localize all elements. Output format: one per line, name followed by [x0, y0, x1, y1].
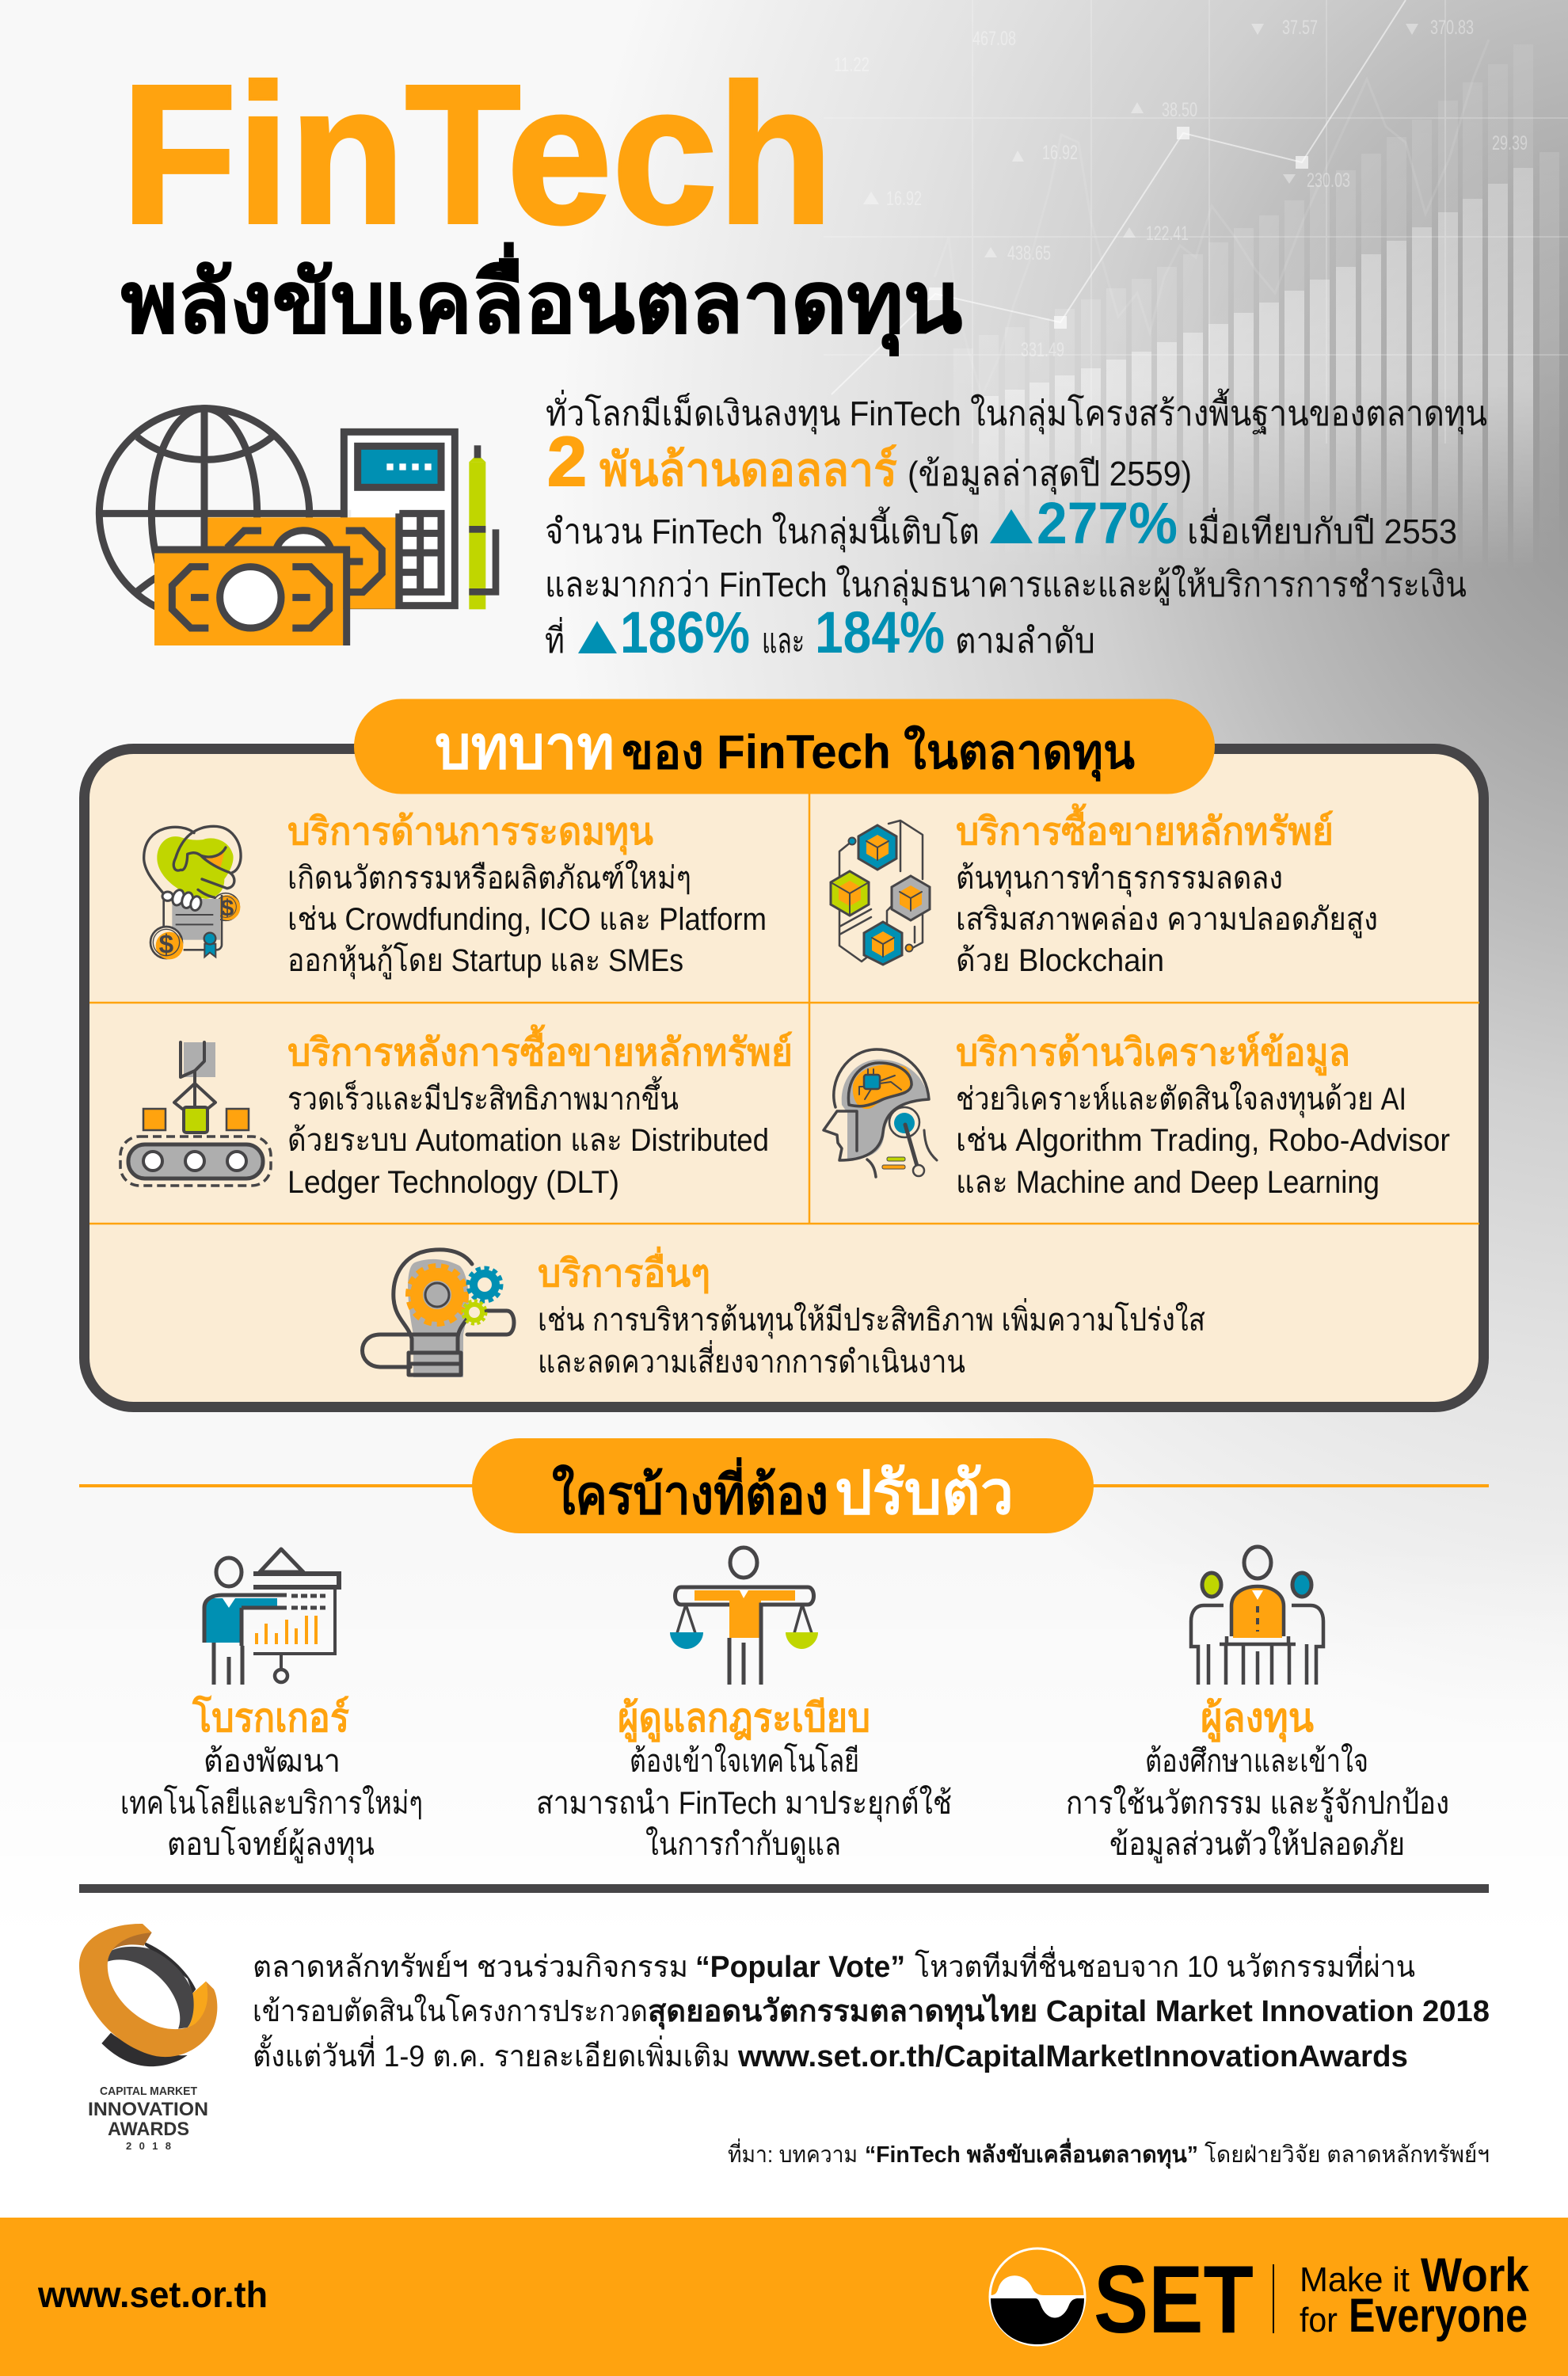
column: investors: ต้องศึกษาและเข้าใจ	[1145, 1742, 1368, 1779]
card: securities trading: บริการซื้อขายหลักทรัพย์	[956, 803, 1334, 853]
card: fundraising: เกิดนวัตกรรมหรือผลิตภัณฑ์ใหม่ๆ	[287, 859, 691, 896]
card: other services: เช่น การบริหารต้นทุนให้มีประสิทธิภาพ เพิ่มความโปร่งใส	[538, 1298, 1205, 1339]
panel heading pill: บทบาท	[435, 714, 615, 782]
card: fundraising: ออกหุ้นกู้โดย Startup และ SMEs	[287, 942, 683, 980]
source note: “FinTech พลังขับเคลื่อนตลาดทุน”	[865, 2138, 1198, 2168]
card: securities trading: ด้วย Blockchain	[956, 943, 1164, 978]
intro text line 4: และมากกว่า FinTech ในกลุ่มธนาคารและและผู้ให้บริการการชำระเงิน	[545, 565, 1467, 606]
logo: Capital Market Innovation Awards 2018	[79, 1924, 217, 2152]
logo: Capital Market Innovation Awards 2018: INNOVATION	[88, 2099, 208, 2120]
column: investors: ข้อมูลส่วนตัวให้ปลอดภัย	[1109, 1826, 1405, 1863]
intro stat: 2 thousand million dollars	[547, 422, 1192, 501]
footer website: www.set.or.th	[37, 2274, 268, 2315]
column: brokers: เทคโนโลยีและบริการใหม่ๆ	[120, 1784, 423, 1821]
card: securities trading	[831, 803, 1378, 978]
icon: robot arm and conveyor	[120, 1042, 271, 1186]
footer band	[0, 2218, 1568, 2376]
title: FinTech: FinTech	[121, 44, 833, 265]
panel heading pill	[354, 699, 1215, 794]
text: 29.39	[1492, 132, 1528, 154]
column: brokers: โบรกเกอร์	[192, 1694, 349, 1740]
logo: SET: for	[1300, 2301, 1338, 2340]
card: fundraising: บริการด้านการระดมทุน	[287, 811, 653, 855]
intro stat: 2 thousand million dollars: พันล้านดอลลาร์	[599, 444, 897, 496]
source note	[728, 2138, 1490, 2168]
logo: Capital Market Innovation Awards 2018: CAPITAL MARKET	[100, 2085, 197, 2098]
section heading pill: who must adapt: ปรับตัว	[835, 1460, 1014, 1527]
intro stat: 186% and 184%	[545, 600, 1095, 665]
column: regulators: ผู้ดูแลกฎระเบียบ	[618, 1696, 870, 1742]
campaign text: โหวตทีมที่ชื่นชอบจาก 10 นวัตกรรมที่ผ่าน	[915, 1946, 1415, 1984]
card: other services: และลดความเสี่ยงจากการดำเนินงาน	[538, 1340, 965, 1380]
icon: handshake heart and certificate: $	[221, 896, 234, 922]
card: data analytics: บริการด้านวิเคราะห์ข้อมูล	[956, 1031, 1350, 1076]
card: post-trade services: ด้วยระบบ Automation และ Distributed	[287, 1123, 769, 1158]
card: securities trading: เสริมสภาพคล่อง ความปลอดภัยสูง	[956, 902, 1378, 938]
campaign text: ตั้งแต่วันที่ 1-9 ต.ค. รายละเอียดเพิ่มเติม	[253, 2034, 730, 2073]
logo: SET: Work	[1421, 2248, 1530, 2302]
column: regulators: ต้องเข้าใจเทคโนโลยี	[630, 1742, 859, 1779]
card: data analytics: และ Machine and Deep Learning	[956, 1165, 1380, 1200]
text: 16.92	[886, 188, 922, 210]
icon: three investors	[1191, 1547, 1323, 1685]
column: brokers: ต้องพัฒนา	[204, 1744, 341, 1779]
campaign text: “Popular Vote”	[695, 1951, 905, 1984]
card: fundraising: เช่น Crowdfunding, ICO และ Platform	[287, 902, 767, 937]
text: 122.41	[1146, 223, 1189, 245]
icon: broker presenting chart	[204, 1549, 339, 1685]
icon: lightbulb with gears	[363, 1250, 514, 1377]
campaign text	[253, 1946, 1490, 2073]
intro stat: 277%	[545, 490, 1457, 556]
intro stat: 2 thousand million dollars: 2	[547, 422, 587, 501]
intro stat: 186% and 184%: ที่	[545, 616, 565, 661]
card: data analytics	[824, 1031, 1450, 1200]
campaign text: ตลาดหลักทรัพย์ฯ ชวนร่วมกิจกรรม	[253, 1950, 688, 1984]
card: post-trade services	[120, 1024, 793, 1200]
text: 331.49	[1021, 339, 1064, 361]
card: other services	[363, 1246, 1205, 1380]
intro stat: 277%: 277%	[1037, 490, 1178, 556]
text: 230.03	[1307, 169, 1350, 192]
intro stat: 186% and 184%: และ	[762, 622, 805, 661]
column: regulators: สามารถนำ FinTech มาประยุกต์ใช้	[536, 1784, 952, 1822]
card: post-trade services: Ledger Technology (DLT)	[287, 1165, 619, 1200]
text: 11.22	[834, 54, 870, 76]
icon: handshake heart and certificate: $	[159, 930, 174, 959]
text: 16.92	[1042, 142, 1078, 164]
subtitle: พลังขับเคลื่อนตลาดทุน	[121, 242, 962, 356]
intro stat: 277%: เมื่อเทียบกับปี 2553	[1187, 507, 1457, 551]
intro stat: 186% and 184%: ตามลำดับ	[955, 622, 1095, 661]
campaign text: www.set.or.th/CapitalMarketInnovationAwards	[737, 2040, 1408, 2073]
logo: SET: SET	[1094, 2245, 1254, 2353]
card: post-trade services: รวดเร็วและมีประสิทธิภาพมากขึ้น	[287, 1076, 679, 1117]
intro stat: 2 thousand million dollars: (ข้อมูลล่าสุดปี 2559)	[908, 455, 1192, 495]
column: brokers: ตอบโจทย์ผู้ลงทุน	[167, 1826, 375, 1864]
logo: SET: Everyone	[1349, 2289, 1528, 2342]
icon: AI head	[824, 1049, 937, 1177]
logo: Capital Market Innovation Awards 2018: AWARDS	[108, 2119, 189, 2140]
icon: globe, payment terminal and banknotes	[99, 408, 496, 645]
card: other services: บริการอื่นๆ	[538, 1246, 710, 1295]
card: post-trade services: บริการหลังการซื้อขายหลักทรัพย์	[287, 1024, 793, 1074]
intro stat: 186% and 184%: 186%	[620, 600, 750, 665]
card: securities trading: ต้นทุนการทำธุรกรรมลดลง	[956, 861, 1283, 897]
card: data analytics: ช่วยวิเคราะห์และตัดสินใจลงทุนด้วย AI	[956, 1080, 1406, 1118]
text: 467.08	[972, 28, 1016, 50]
column: brokers	[120, 1549, 423, 1864]
campaign text: เข้ารอบตัดสินในโครงการประกวด	[253, 1993, 648, 2028]
source note: ที่มา: บทความ	[728, 2138, 858, 2168]
text: 438.65	[1007, 242, 1051, 265]
icon: regulator as scales	[670, 1548, 818, 1685]
column: regulators: ในการกำกับดูแล	[645, 1826, 841, 1863]
section heading pill: who must adapt	[472, 1438, 1094, 1533]
column: investors: ผู้ลงทุน	[1201, 1696, 1314, 1742]
text: 37.57	[1282, 17, 1318, 39]
column: investors	[1066, 1547, 1449, 1863]
intro text line 1: ทั่วโลกมีเม็ดเงินลงทุน FinTech ในกลุ่มโครงสร้างพื้นฐานของตลาดทุน	[546, 388, 1487, 435]
source note: โดยฝ่ายวิจัย ตลาดหลักทรัพย์ฯ	[1205, 2141, 1490, 2168]
card: data analytics: เช่น Algorithm Trading, Robo-Advisor	[956, 1123, 1450, 1158]
text: 370.83	[1430, 17, 1474, 39]
intro stat: 277%: จำนวน FinTech ในกลุ่มนี้เติบโต	[545, 506, 980, 553]
section heading pill: who must adapt: ใครบ้างที่ต้อง	[552, 1456, 828, 1525]
intro stat: 186% and 184%: 184%	[815, 600, 945, 665]
card: fundraising	[144, 811, 767, 980]
logo: SET: Make it	[1300, 2260, 1410, 2299]
panel: roles of FinTech	[84, 699, 1484, 1407]
panel heading pill: ของ FinTech ในตลาดทุน	[622, 725, 1135, 782]
column: investors: การใช้นวัตกรรม และรู้จักปกป้อง	[1066, 1784, 1449, 1822]
logo: SET	[990, 2245, 1530, 2353]
icon: blockchain hexagons	[831, 821, 930, 965]
column: regulators	[536, 1548, 952, 1863]
text: 38.50	[1162, 99, 1197, 121]
icon: handshake heart and certificate	[144, 826, 241, 959]
logo: Capital Market Innovation Awards 2018: 2018	[126, 2140, 171, 2152]
campaign text: สุดยอดนวัตกรรมตลาดทุนไทย Capital Market Innovation 2018	[648, 1993, 1490, 2030]
